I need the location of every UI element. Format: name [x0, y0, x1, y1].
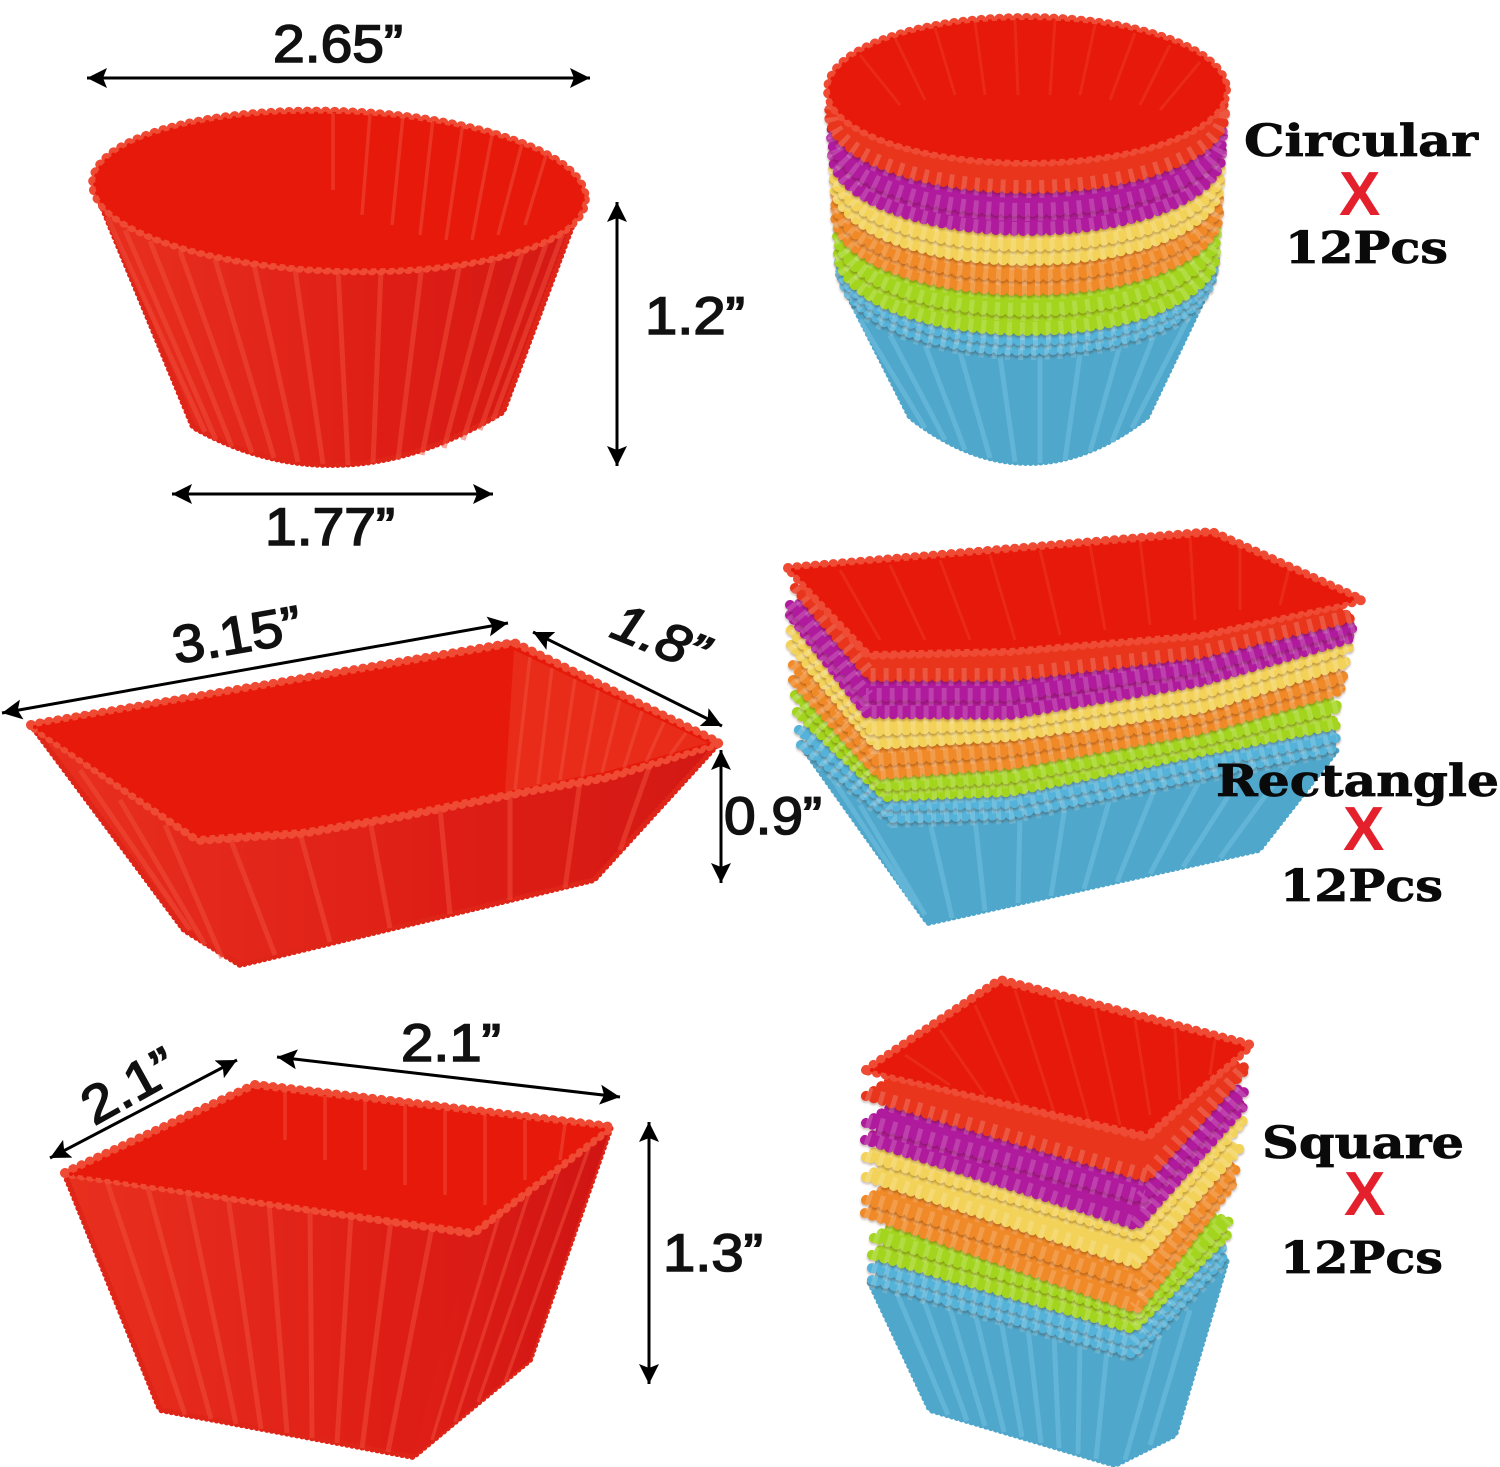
label: Rectangle x 12Pcs: X	[1343, 795, 1384, 864]
dimension: rectangle width 1.8 inches	[533, 592, 722, 726]
label: Square x 12Pcs: 12Pcs	[1280, 1233, 1443, 1284]
right side wall	[413, 1127, 611, 1457]
label: Circular x 12Pcs: Circular	[1244, 116, 1479, 167]
label: Circular x 12Pcs	[1244, 116, 1479, 274]
dimension: rectangle height 0.9 inches	[721, 750, 822, 883]
dimension: square side 2.1 inches right	[277, 1014, 620, 1097]
label: Circular x 12Pcs: 12Pcs	[1285, 223, 1448, 274]
dimension: rectangle width 1.8 inches: 1.8”	[604, 592, 719, 685]
dimension: square side 2.1 inches left	[50, 1036, 237, 1158]
dimension: base width 1.77 inches: 1.77”	[265, 498, 395, 557]
rectangle cup stack	[788, 532, 1362, 923]
dimension: top width 2.65 inches: 2.65”	[273, 15, 403, 74]
label: Rectangle x 12Pcs	[1216, 756, 1499, 912]
single round cup	[90, 103, 588, 465]
label: Square x 12Pcs: X	[1344, 1160, 1385, 1229]
dimension: rectangle length 3.15 inches	[2, 595, 508, 713]
dimension: height 1.2 inches: 1.2”	[645, 287, 745, 346]
round cup stack	[828, 18, 1226, 463]
right inner wall	[505, 650, 708, 792]
dimension: rectangle length 3.15 inches: 3.15”	[168, 595, 306, 676]
label: Square x 12Pcs	[1262, 1118, 1464, 1284]
dimension: square height 1.3 inches: 1.3”	[663, 1224, 763, 1283]
single rectangle cup	[31, 643, 719, 965]
label: Rectangle x 12Pcs: Rectangle	[1216, 756, 1499, 807]
label: Square x 12Pcs: Square	[1262, 1118, 1464, 1169]
single square cup	[65, 1085, 611, 1457]
square cup stack	[865, 980, 1251, 1465]
dimension: rectangle height 0.9 inches: 0.9”	[724, 787, 822, 846]
dimension: square side 2.1 inches right: 2.1”	[401, 1014, 501, 1073]
label: Rectangle x 12Pcs: 12Pcs	[1280, 861, 1443, 912]
dimension: square side 2.1 inches left: 2.1”	[71, 1036, 187, 1136]
label: Circular x 12Pcs: X	[1339, 160, 1380, 229]
